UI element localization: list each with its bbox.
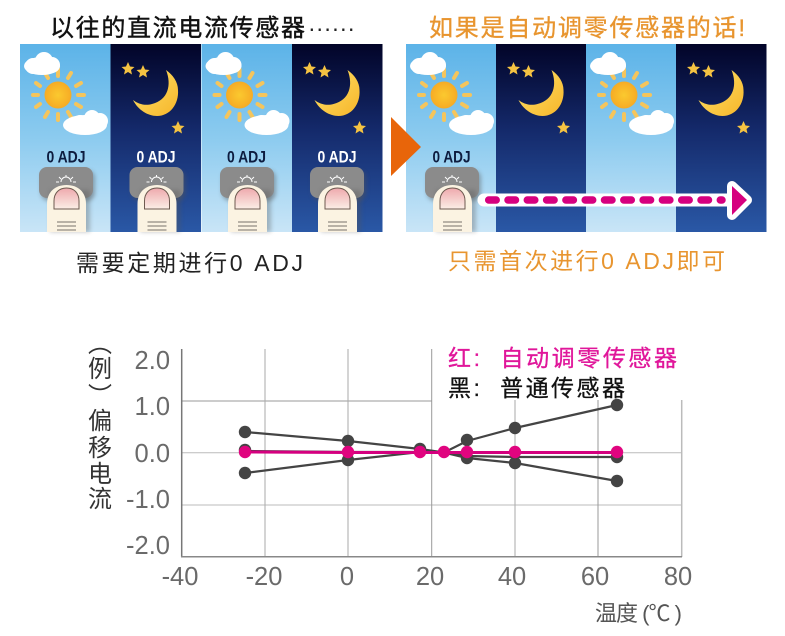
heading: conventional sensor: ······ <box>308 15 355 41</box>
x axis tick labels: 0 <box>340 563 354 591</box>
y axis title: ︶ <box>88 383 112 410</box>
legend item: red: 红: 自动调零传感器 <box>448 345 677 371</box>
heading: conventional sensor: 以往的直流电流传感器 <box>50 15 305 42</box>
y axis tick labels <box>126 347 170 560</box>
grid lines <box>181 349 682 557</box>
x axis tick labels: 40 <box>498 563 526 591</box>
panel 2 night <box>110 44 201 232</box>
label 3: 0 ADJ <box>227 148 266 166</box>
x axis tick labels: 20 <box>416 563 444 591</box>
panel 4 night <box>292 44 382 232</box>
y axis title: 流 <box>88 486 112 513</box>
arrow: dashed pink persistence arrow <box>484 186 747 215</box>
finger <box>425 167 481 232</box>
finger 4 <box>310 167 366 232</box>
y axis tick labels: 0.0 <box>135 440 170 468</box>
x axis tick labels: 80 <box>664 563 692 591</box>
panel 4 night <box>676 44 766 232</box>
y axis tick labels: 1.0 <box>135 393 170 421</box>
finger 2 <box>130 167 186 232</box>
x axis tick labels: -20 <box>246 563 282 591</box>
label 2: 0 ADJ <box>136 148 176 166</box>
panel 3 day <box>202 44 292 232</box>
legend <box>448 345 677 401</box>
y axis title: ︵ <box>88 331 112 358</box>
label: 0 ADJ <box>432 148 470 166</box>
label 1: 0 ADJ <box>46 148 86 166</box>
x axis tick labels <box>162 563 692 591</box>
caption: only first zero adjust: 只需首次进行0 ADJ即可 <box>448 248 725 274</box>
x axis tick labels: -40 <box>162 563 198 591</box>
panel 1 day <box>20 44 110 232</box>
y axis tick labels: -1.0 <box>126 486 170 514</box>
label 4: 0 ADJ <box>318 148 356 166</box>
series: auto zero sensor <box>239 446 623 458</box>
y axis title: 例 <box>88 356 112 383</box>
y axis title: 偏 <box>88 408 112 435</box>
caption: periodic zero adjust: 需要定期进行0 ADJ <box>76 250 303 276</box>
finger 3 <box>220 167 276 232</box>
y axis title: 移 <box>88 435 112 462</box>
y axis tick labels: 2.0 <box>135 347 170 375</box>
finger 1 <box>39 167 95 232</box>
chart: offset current versus temperature <box>88 331 692 626</box>
panel 2 night <box>496 44 586 232</box>
panel 1 day <box>406 44 496 232</box>
y axis tick labels: -2.0 <box>126 532 170 560</box>
x axis title: 温度 (℃ ) <box>595 601 682 626</box>
heading: auto zero sensor: 如果是自动调零传感器的话! <box>429 15 745 42</box>
y axis title: 电 <box>88 461 112 488</box>
legend item: black: 黑: 普通传感器 <box>448 375 625 401</box>
panel: conventional sensor day and night cycle <box>20 44 382 232</box>
panel 3 day <box>586 44 676 232</box>
arrow: orange transition triangle <box>391 117 421 176</box>
y axis title <box>88 331 112 513</box>
panel: auto zero sensor day and night cycle <box>406 44 766 232</box>
series: conventional sensors <box>239 399 623 487</box>
x axis tick labels: 60 <box>581 563 609 591</box>
